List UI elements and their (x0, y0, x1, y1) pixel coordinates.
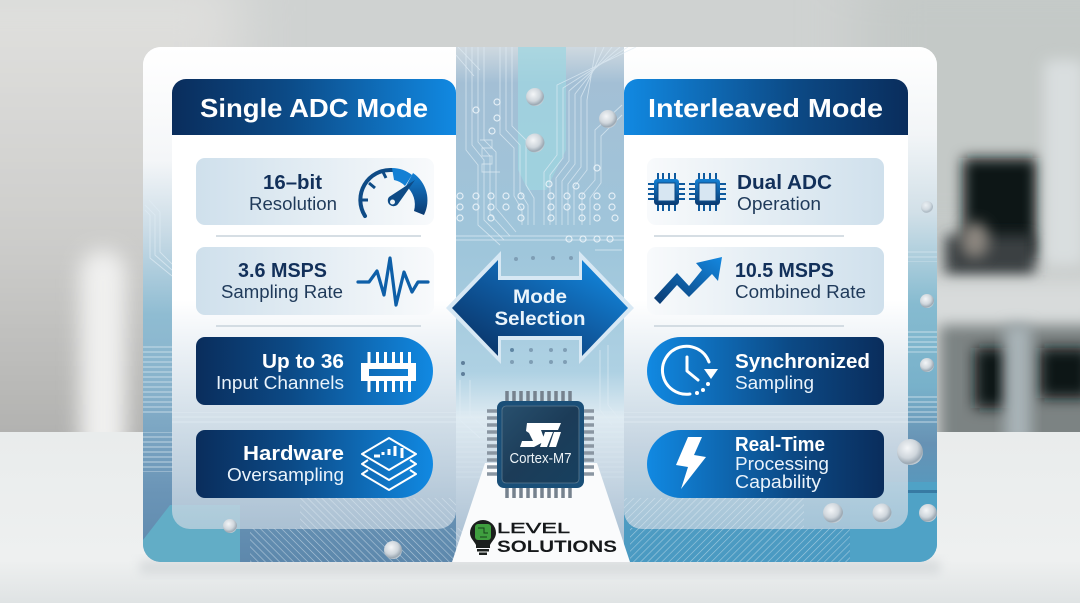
icon: two chips (648, 173, 726, 211)
panel header: Interleaved Mode (648, 93, 883, 123)
row: real-time processing capability: Processing (735, 454, 829, 474)
row: hardware oversampling: Hardware (243, 443, 344, 465)
icon: waveform (358, 258, 428, 305)
row: synchronized sampling: Sampling (735, 373, 814, 393)
card: circuit board backdrop (143, 47, 937, 562)
divider (216, 235, 421, 237)
row: up to 36 input channels (196, 337, 433, 405)
row: synchronized sampling (647, 337, 884, 405)
row: up to 36 input channels: Input Channels (216, 373, 344, 393)
row: synchronized sampling: Synchronized (735, 351, 870, 373)
mode selection double arrow: Selection (494, 309, 586, 330)
row: 3.6 MSPS sampling rate: 3.6 MSPS (238, 260, 327, 282)
Cortex-M7 chip: Cortex-M7 (510, 450, 572, 467)
icon: speedometer gauge (360, 168, 427, 216)
row: hardware oversampling: Oversampling (227, 465, 344, 485)
row: 10.5 MSPS combined rate: Combined Rate (735, 282, 866, 302)
Level Solutions logo: SOLUTIONS (497, 537, 617, 556)
mode selection double arrow (446, 251, 634, 364)
ST logo (520, 423, 561, 447)
panel: Interleaved Mode (624, 79, 908, 529)
row: real-time processing capability: Capability (735, 472, 821, 492)
Level Solutions logo (470, 520, 617, 556)
icon: connector (361, 352, 416, 392)
divider (654, 325, 844, 327)
row: real-time processing capability: Real-Time (735, 434, 825, 456)
icon: layered stack (362, 438, 416, 490)
icon: lightning bolt (676, 437, 706, 489)
icon: light bulb (470, 520, 496, 555)
row: 10.5 MSPS combined rate (647, 247, 884, 315)
row: 16-bit resolution: 16–bit (263, 172, 322, 194)
row: dual ADC operation: Operation (737, 194, 821, 214)
panel header (624, 79, 908, 135)
row: real-time processing capability (647, 430, 884, 498)
metal solder balls (223, 88, 937, 559)
row: 3.6 MSPS sampling rate: Sampling Rate (221, 282, 343, 302)
row: up to 36 input channels: Up to 36 (262, 351, 344, 373)
Cortex-M7 chip (487, 391, 594, 498)
icon: rising arrow (654, 257, 722, 304)
icon: clock with arrow (662, 346, 718, 395)
panel header (172, 79, 456, 135)
row: 10.5 MSPS combined rate: 10.5 MSPS (735, 260, 834, 282)
row: 3.6 MSPS sampling rate (196, 247, 434, 315)
panel: Single ADC Mode (172, 79, 456, 529)
row: dual ADC operation: Dual ADC (737, 172, 832, 194)
divider (654, 235, 844, 237)
Level Solutions logo: LEVEL (497, 520, 570, 537)
row: 16-bit resolution: Resolution (249, 194, 337, 214)
mode selection double arrow: Mode (513, 287, 567, 308)
row: dual ADC operation (647, 158, 884, 225)
divider (216, 325, 421, 327)
row: 16-bit resolution (196, 158, 434, 225)
row: hardware oversampling (196, 430, 433, 498)
panel header: Single ADC Mode (200, 93, 428, 123)
